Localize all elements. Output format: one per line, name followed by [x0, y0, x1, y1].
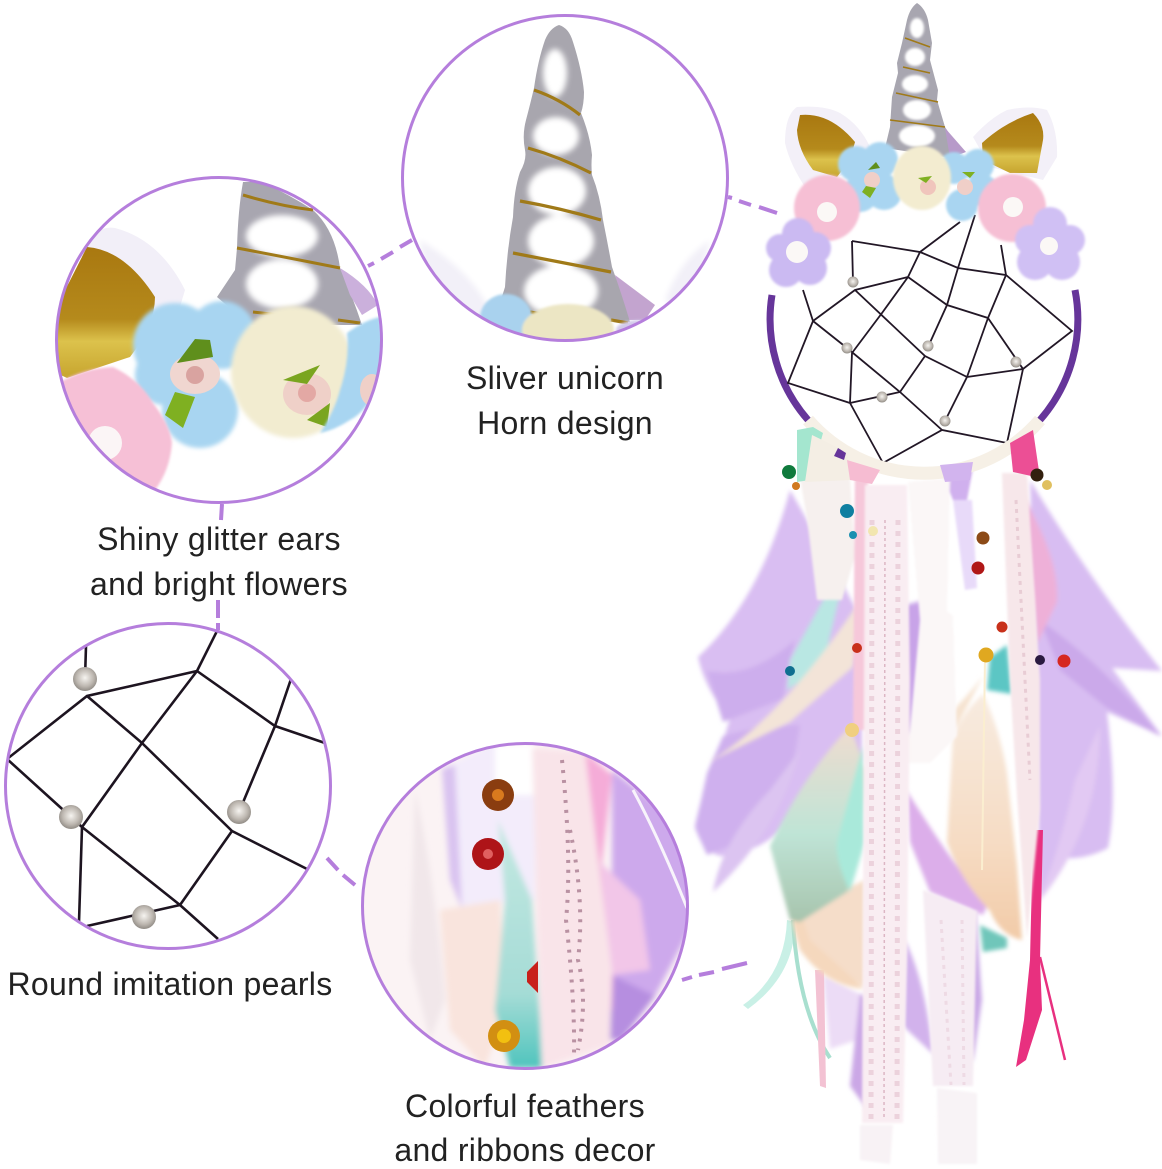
heading: pearls caption: Round imitation pearls	[8, 966, 332, 1002]
heading: ears caption: Shiny glitter ears	[97, 521, 341, 557]
icon: pink flower	[60, 367, 172, 490]
icon: flower crown	[766, 142, 1085, 287]
icon: horn base	[217, 182, 378, 325]
icon: peach feather	[440, 900, 505, 1068]
icon: gold glitter ears	[797, 113, 1043, 177]
icon: horn close-up	[490, 25, 630, 323]
icon: web pearls	[842, 276, 1022, 426]
icon: silver horn	[885, 3, 966, 158]
icon: hoop ribbon ties	[797, 420, 1040, 484]
icon: pale lace strip left	[412, 816, 443, 1030]
icon: gold glitter ear	[50, 247, 155, 378]
heading: horn caption: Horn design	[477, 405, 653, 441]
dashed connector: ears circle to horn circle	[368, 240, 412, 266]
icon: red bead	[472, 838, 504, 870]
heading: horn caption: Sliver unicorn	[466, 360, 664, 396]
icon: lace holes	[562, 760, 583, 1055]
heading: feathers caption: Colorful feathers	[405, 1088, 645, 1124]
panel: silver horn detail	[402, 16, 728, 356]
icon: peach and pink feathers right	[897, 645, 1022, 952]
chart: web strings	[7, 629, 325, 939]
icon: pearl 3	[227, 800, 251, 824]
icon: white quill	[633, 790, 687, 908]
icon: pearl 2	[59, 805, 83, 829]
dashed connector: feathers circle to dream catcher	[682, 963, 747, 980]
panel: feathers and ribbons detail	[360, 742, 695, 1072]
icon: white ears	[785, 107, 1057, 190]
icon: lace strip centre	[532, 748, 612, 1068]
icon: blue flower	[133, 301, 256, 448]
heading: feathers caption	[394, 1088, 656, 1168]
icon: yellow bead	[488, 1020, 520, 1052]
illustration: unicorn dream catcher	[695, 3, 1162, 1164]
icon: pale ear edges	[422, 244, 708, 314]
panel: glitter ears and flowers detail	[50, 178, 385, 502]
dashed connector: horn circle to dream catcher	[728, 197, 777, 213]
icon: ribbons	[743, 830, 1065, 1088]
icon: pearl 4	[132, 905, 156, 929]
heading: ears caption	[90, 521, 348, 602]
icon: purple feather	[608, 770, 686, 998]
icon: purple ribbon behind horn	[615, 275, 655, 320]
icon: pink feather	[583, 750, 615, 1020]
chart: dream catcher web	[788, 215, 1072, 463]
panel: imitation pearls detail	[6, 624, 330, 948]
icon: cream flower	[231, 306, 355, 438]
heading: feathers caption: and ribbons decor	[394, 1132, 656, 1168]
icon: teal feather	[495, 820, 542, 1068]
icon: teal and peach feathers left	[707, 551, 867, 989]
icon: brown bead	[482, 779, 514, 811]
icon: pale ear border	[82, 228, 185, 308]
icon: right blue flower	[320, 317, 385, 433]
icon: lace strips	[800, 465, 1040, 1164]
icon: dream catcher hoop	[770, 290, 1078, 420]
dashed connector: pearls circle to feathers circle	[327, 858, 355, 885]
icon: flowers at horn base	[479, 292, 642, 339]
icon: purple feathers	[695, 480, 1162, 1113]
icon: beads	[782, 465, 1070, 737]
icon: lavender ribbon	[460, 766, 530, 900]
icon: feather quill	[982, 657, 985, 870]
dashed connector: ears circle to pearls circle	[218, 504, 222, 630]
heading: horn caption	[466, 360, 664, 441]
icon: pearl 1	[73, 667, 97, 691]
heading: ears caption: and bright flowers	[90, 566, 348, 602]
icon: orange-red bead	[527, 961, 538, 993]
